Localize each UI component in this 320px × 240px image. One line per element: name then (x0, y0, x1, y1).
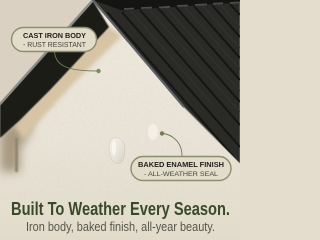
wall texture (0, 30, 240, 200)
callout: baked enamel finish (131, 156, 231, 180)
callout subtext: - RUST RESISTANT (23, 40, 86, 49)
connector: cast iron body to wall (54, 52, 101, 73)
water droplet small (148, 124, 158, 140)
callout pill (12, 28, 96, 52)
callout: cast iron body (12, 28, 96, 52)
callout heading: CAST IRON BODY (23, 31, 86, 40)
callout pill (131, 156, 231, 180)
left black eave (0, 0, 109, 138)
fascia shadow stripe (15, 138, 18, 172)
right dark roof (93, 0, 240, 164)
connector: enamel droplet to callout (160, 131, 182, 156)
callout heading: BAKED ENAMEL FINISH (138, 162, 224, 169)
upper left beige backdrop (0, 0, 93, 104)
background wall (0, 0, 240, 240)
inner tan shadow (14, 25, 122, 140)
callout subtext: - ALL-WEATHER SEAL (144, 171, 218, 178)
water droplet large (109, 138, 125, 164)
lower-left wall shadow (0, 112, 32, 172)
